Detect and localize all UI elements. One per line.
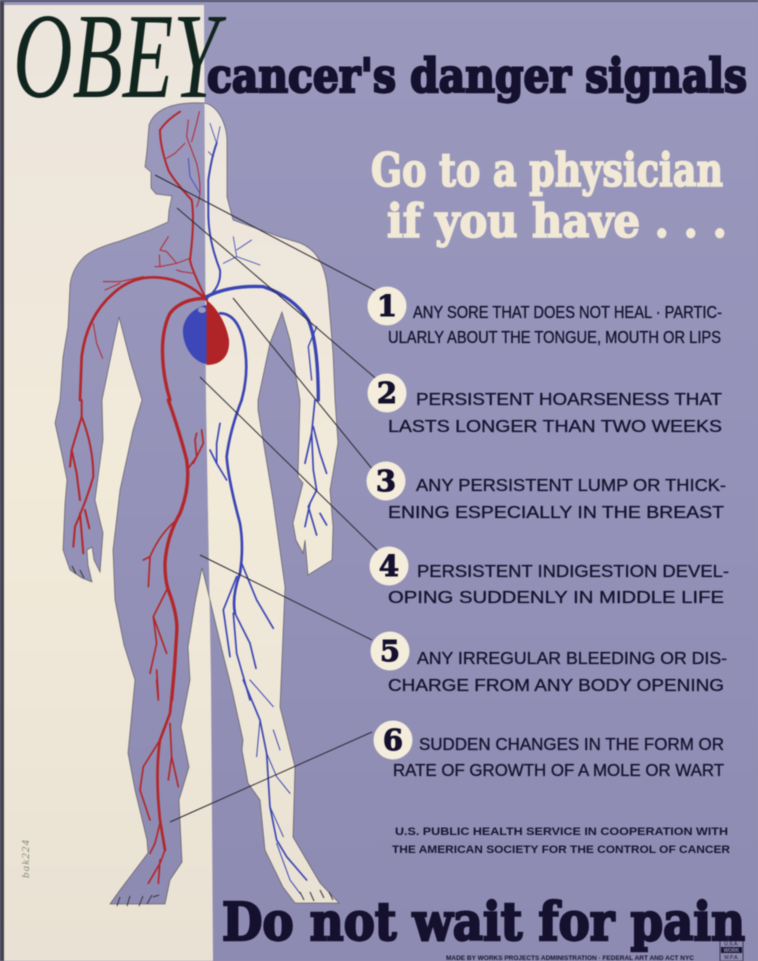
- toes and finger marks: [72, 566, 333, 906]
- credit text: THE AMERICAN SOCIETY FOR THE CONTROL OF CANCER: [392, 844, 730, 856]
- signal 1: 1: [377, 289, 397, 323]
- signal 3: ENING ESPECIALLY IN THE BREAST: [388, 502, 724, 522]
- signal 3: ANY PERSISTENT LUMP OR THICK-: [416, 475, 726, 495]
- union stamp: W.P.A.: [724, 955, 739, 961]
- signal 2: 2: [377, 376, 397, 410]
- subheading: go to a physician: if you have . . .: [387, 194, 727, 248]
- signal 5: ANY IRREGULAR BLEEDING OR DIS-: [417, 648, 727, 668]
- body silhouette, split into two tones: [55, 103, 339, 904]
- heart: [183, 300, 229, 365]
- signal 2: LASTS LONGER THAN TWO WEEKS: [388, 416, 722, 436]
- signal 3: 3: [376, 464, 396, 498]
- signal 5: [370, 632, 727, 695]
- signal 5: 5: [380, 634, 400, 668]
- signal 4: [370, 546, 729, 607]
- signal 6: RATE OF GROWTH OF A MOLE OR WART: [393, 760, 724, 780]
- signal 4: PERSISTENT INDIGESTION DEVEL-: [417, 561, 729, 581]
- signal 3: [366, 462, 726, 522]
- union stamp: WORK: [724, 948, 740, 954]
- figure: human body with circulatory system: [55, 103, 339, 906]
- signal 1: [368, 286, 722, 347]
- signal 5: CHARGE FROM ANY BODY OPENING: [388, 675, 724, 695]
- leader lines from body to numbered signals: [155, 175, 380, 822]
- artist signature: bak224: [20, 840, 32, 878]
- union stamp: U.S.A.: [724, 942, 739, 948]
- signal 6: 6: [383, 723, 403, 757]
- signal 4: OPING SUDDENLY IN MIDDLE LIFE: [388, 587, 724, 607]
- credit text: [392, 826, 730, 856]
- signal 6: SUDDEN CHANGES IN THE FORM OR: [419, 734, 724, 754]
- union stamp: [720, 939, 743, 961]
- signal 6: [374, 720, 724, 780]
- signal 4: 4: [379, 549, 399, 583]
- credit text: U.S. PUBLIC HEALTH SERVICE IN COOPERATION WITH: [395, 826, 728, 838]
- signal 2: PERSISTENT HOARSENESS THAT: [416, 389, 722, 409]
- red arteries: [80, 112, 207, 400]
- blue veins: [188, 123, 318, 400]
- subheading: go to a physician: [371, 143, 727, 248]
- signal 2: [368, 374, 722, 436]
